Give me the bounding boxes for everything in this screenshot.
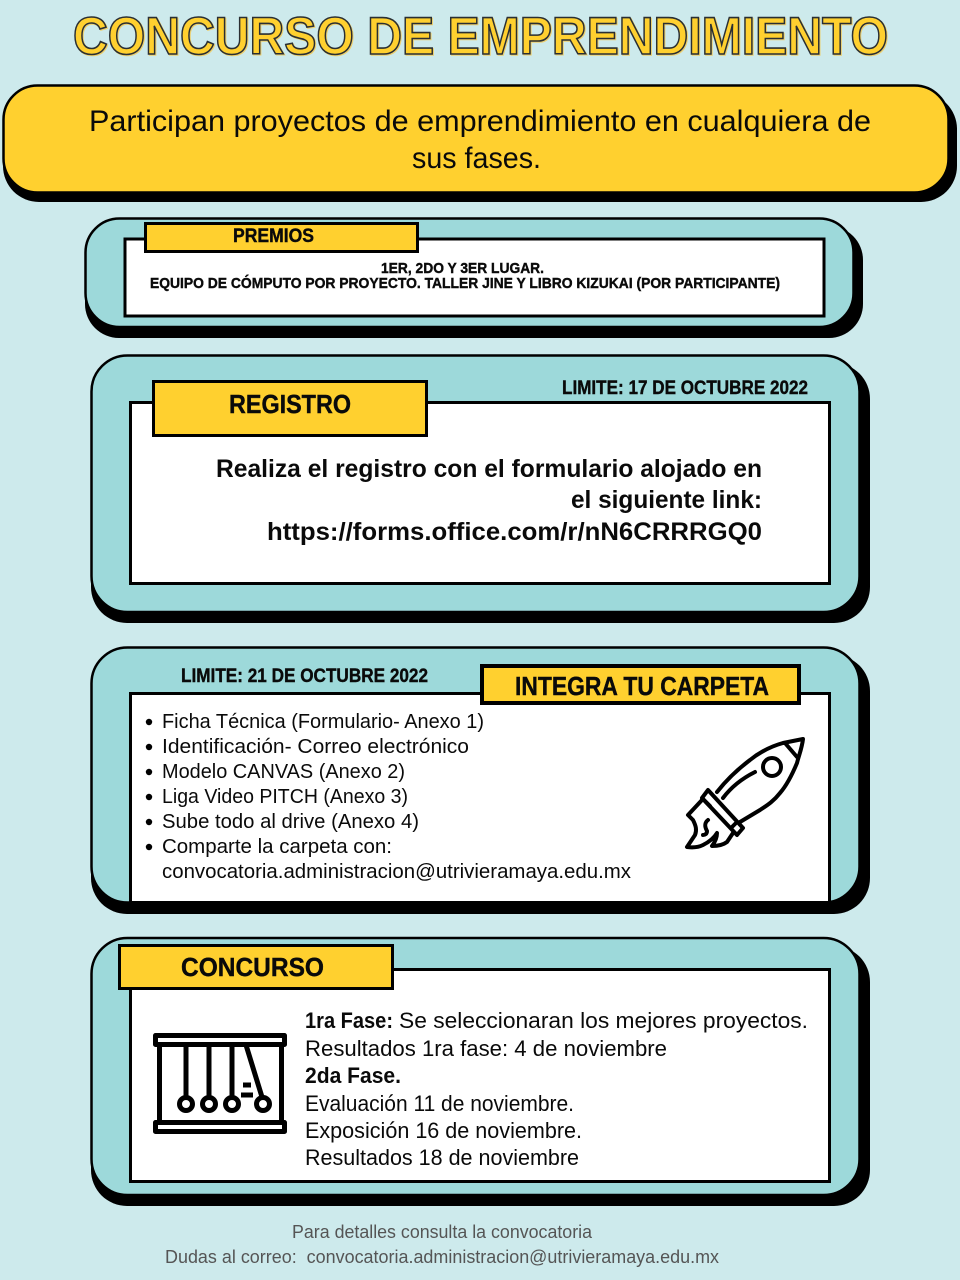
registro text xyxy=(216,455,762,546)
concurso text: Resultados 18 de noviembre xyxy=(305,1145,579,1170)
concurso text: Evaluación 11 de noviembre. xyxy=(305,1091,574,1116)
checklist: Liga Video PITCH (Anexo 3) xyxy=(162,786,408,808)
concurso text: 1ra Fase: xyxy=(305,1008,393,1033)
premios text xyxy=(150,261,780,292)
panel: premios xyxy=(85,218,863,338)
premios heading: PREMIOS xyxy=(233,226,314,247)
carpeta deadline: LIMITE: 21 DE OCTUBRE 2022 xyxy=(181,666,428,687)
panel: integra tu carpeta xyxy=(91,648,870,914)
panel: registro xyxy=(91,356,870,623)
checklist: convocatoria.administracion@utrivieramaya.edu.mx xyxy=(162,861,631,883)
checklist xyxy=(146,711,631,883)
checklist: Identificación- Correo electrónico xyxy=(162,736,469,758)
panel: intro banner: Participan proyectos de emprendimiento en cualquiera de xyxy=(89,105,871,138)
registro text: https://forms.office.com/r/nN6CRRRGQ0 xyxy=(267,518,762,546)
concurso heading: CONCURSO xyxy=(181,952,324,982)
concurso text: Exposición 16 de noviembre. xyxy=(305,1118,582,1143)
checklist: Comparte la carpeta con: xyxy=(162,836,392,858)
footer text: Para detalles consulta la convocatoria xyxy=(292,1222,593,1242)
checklist: Modelo CANVAS (Anexo 2) xyxy=(162,761,405,783)
concurso text xyxy=(305,1008,808,1170)
premios text: 1ER, 2DO Y 3ER LUGAR. xyxy=(381,261,544,277)
concurso text: 2da Fase. xyxy=(305,1063,401,1088)
checklist: Sube todo al drive (Anexo 4) xyxy=(162,811,419,833)
title: CONCURSO DE EMPRENDIMIENTO xyxy=(73,7,888,66)
registro text: el siguiente link: xyxy=(571,486,762,514)
icon: newton's cradle xyxy=(156,1036,284,1132)
concurso text: Se seleccionaran los mejores proyectos. xyxy=(399,1008,808,1033)
checklist: Ficha Técnica (Formulario- Anexo 1) xyxy=(162,711,484,733)
registro text: Realiza el registro con el formulario alojado en xyxy=(216,455,762,483)
premios heading xyxy=(146,224,418,252)
icon: rocket xyxy=(687,739,803,847)
registro deadline: LIMITE: 17 DE OCTUBRE 2022 xyxy=(562,378,808,399)
registro heading xyxy=(154,382,426,436)
panel: intro banner xyxy=(3,86,957,202)
panel: concurso xyxy=(91,938,870,1206)
registro heading: REGISTRO xyxy=(229,389,351,419)
concurso text: Resultados 1ra fase: 4 de noviembre xyxy=(305,1036,667,1061)
premios text: EQUIPO DE CÓMPUTO POR PROYECTO. TALLER JINE Y LIBRO KIZUKAI (POR PARTICIPANTE) xyxy=(150,274,780,292)
panel: intro banner: sus fases. xyxy=(412,142,541,175)
title: CONCURSO DE EMPRENDIMIENTO xyxy=(74,8,889,67)
carpeta heading: INTEGRA TU CARPETA xyxy=(515,671,769,701)
concurso heading xyxy=(120,946,392,988)
footer text xyxy=(165,1222,719,1267)
footer text: Dudas al correo: convocatoria.administracion@utrivieramaya.edu.mx xyxy=(165,1247,719,1267)
